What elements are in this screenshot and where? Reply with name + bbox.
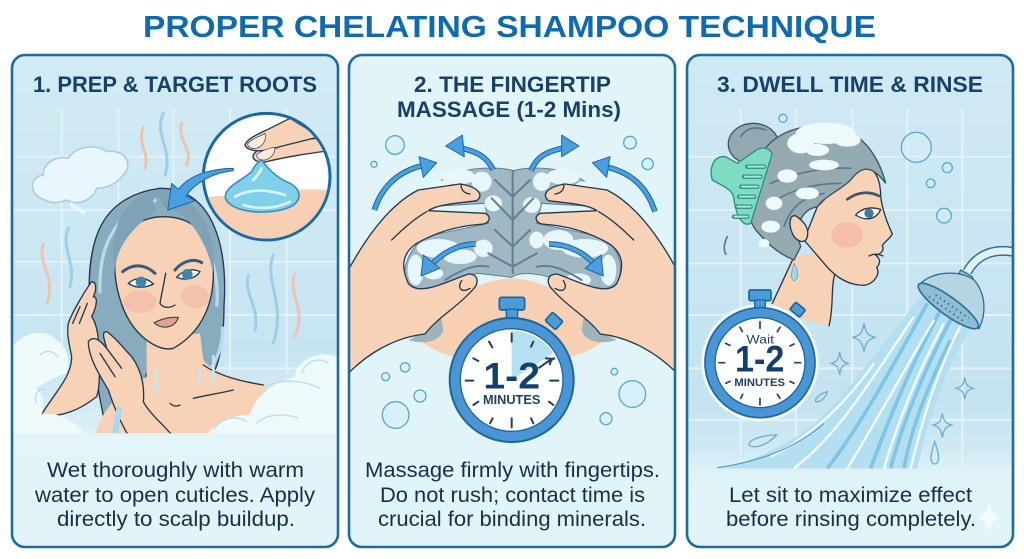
- hair bun: [728, 123, 778, 165]
- description 1: directly to scalp buildup.: [57, 507, 295, 531]
- ear: [790, 216, 808, 241]
- woman in profile with lather: [711, 123, 892, 326]
- massage arrows: [374, 135, 655, 276]
- heading 2: 2. THE FINGERTIP: [414, 72, 611, 97]
- hair claw clip: [711, 148, 772, 224]
- stopwatch: wait 1-2 minutes: MINUTES: [734, 377, 785, 389]
- title: PROPER CHELATING SHAMPOO TECHNIQUE: [143, 9, 876, 44]
- woman with wet hair: [40, 188, 267, 445]
- description 3: [726, 483, 976, 531]
- heading 3: 3. DWELL TIME & RINSE: [717, 72, 983, 97]
- arrow to scalp: [168, 168, 233, 210]
- heading 2: [397, 72, 621, 122]
- lather on hair: [759, 123, 861, 248]
- stopwatch: 1-2 minutes: MINUTES: [483, 393, 540, 407]
- stopwatch: wait 1-2 minutes: Wait: [746, 332, 775, 346]
- panel: step 3 dwell time and rinse: [687, 55, 1014, 547]
- steam waves: [42, 113, 299, 343]
- stopwatch: 1-2 minutes: [450, 297, 574, 442]
- hands in hair: [42, 281, 172, 434]
- heading 2: MASSAGE (1-2 Mins): [397, 97, 621, 122]
- description 2: Do not rush; contact time is: [380, 483, 645, 507]
- description 1: water to open cuticles. Apply: [34, 483, 315, 507]
- stopwatch: wait 1-2 minutes: 1-2: [735, 338, 784, 380]
- heading 1: 1. PREP & TARGET ROOTS: [33, 72, 317, 97]
- panel: step 1 prep and target roots: [12, 55, 342, 547]
- face details: [123, 260, 209, 327]
- water stream: [714, 297, 974, 468]
- description 2: Massage firmly with fingertips.: [365, 458, 660, 482]
- left hand: [342, 184, 489, 373]
- gel on fingertip inset: [203, 113, 333, 247]
- bubbles: [779, 114, 952, 223]
- right hand: [536, 184, 685, 373]
- bottom foam: [12, 333, 342, 453]
- description 3: before rinsing completely.: [726, 507, 976, 531]
- shower head: [913, 251, 1012, 335]
- forehead: [415, 278, 602, 357]
- panel: step 2 fingertip massage: [342, 55, 685, 547]
- stopwatch: 1-2 minutes: 1-2: [483, 354, 540, 396]
- hair and lather: [404, 168, 620, 342]
- bubbles: [371, 136, 653, 428]
- description 2: [365, 458, 660, 531]
- description 3: Let sit to maximize effect: [729, 483, 972, 507]
- description 1: Wet thoroughly with warm: [47, 458, 304, 482]
- description 1: [34, 458, 315, 531]
- steam cloud: [32, 147, 128, 213]
- description 2: crucial for binding minerals.: [378, 507, 646, 531]
- sparkles and drops: [749, 323, 973, 464]
- stopwatch: wait 1-2 minutes: [701, 290, 819, 421]
